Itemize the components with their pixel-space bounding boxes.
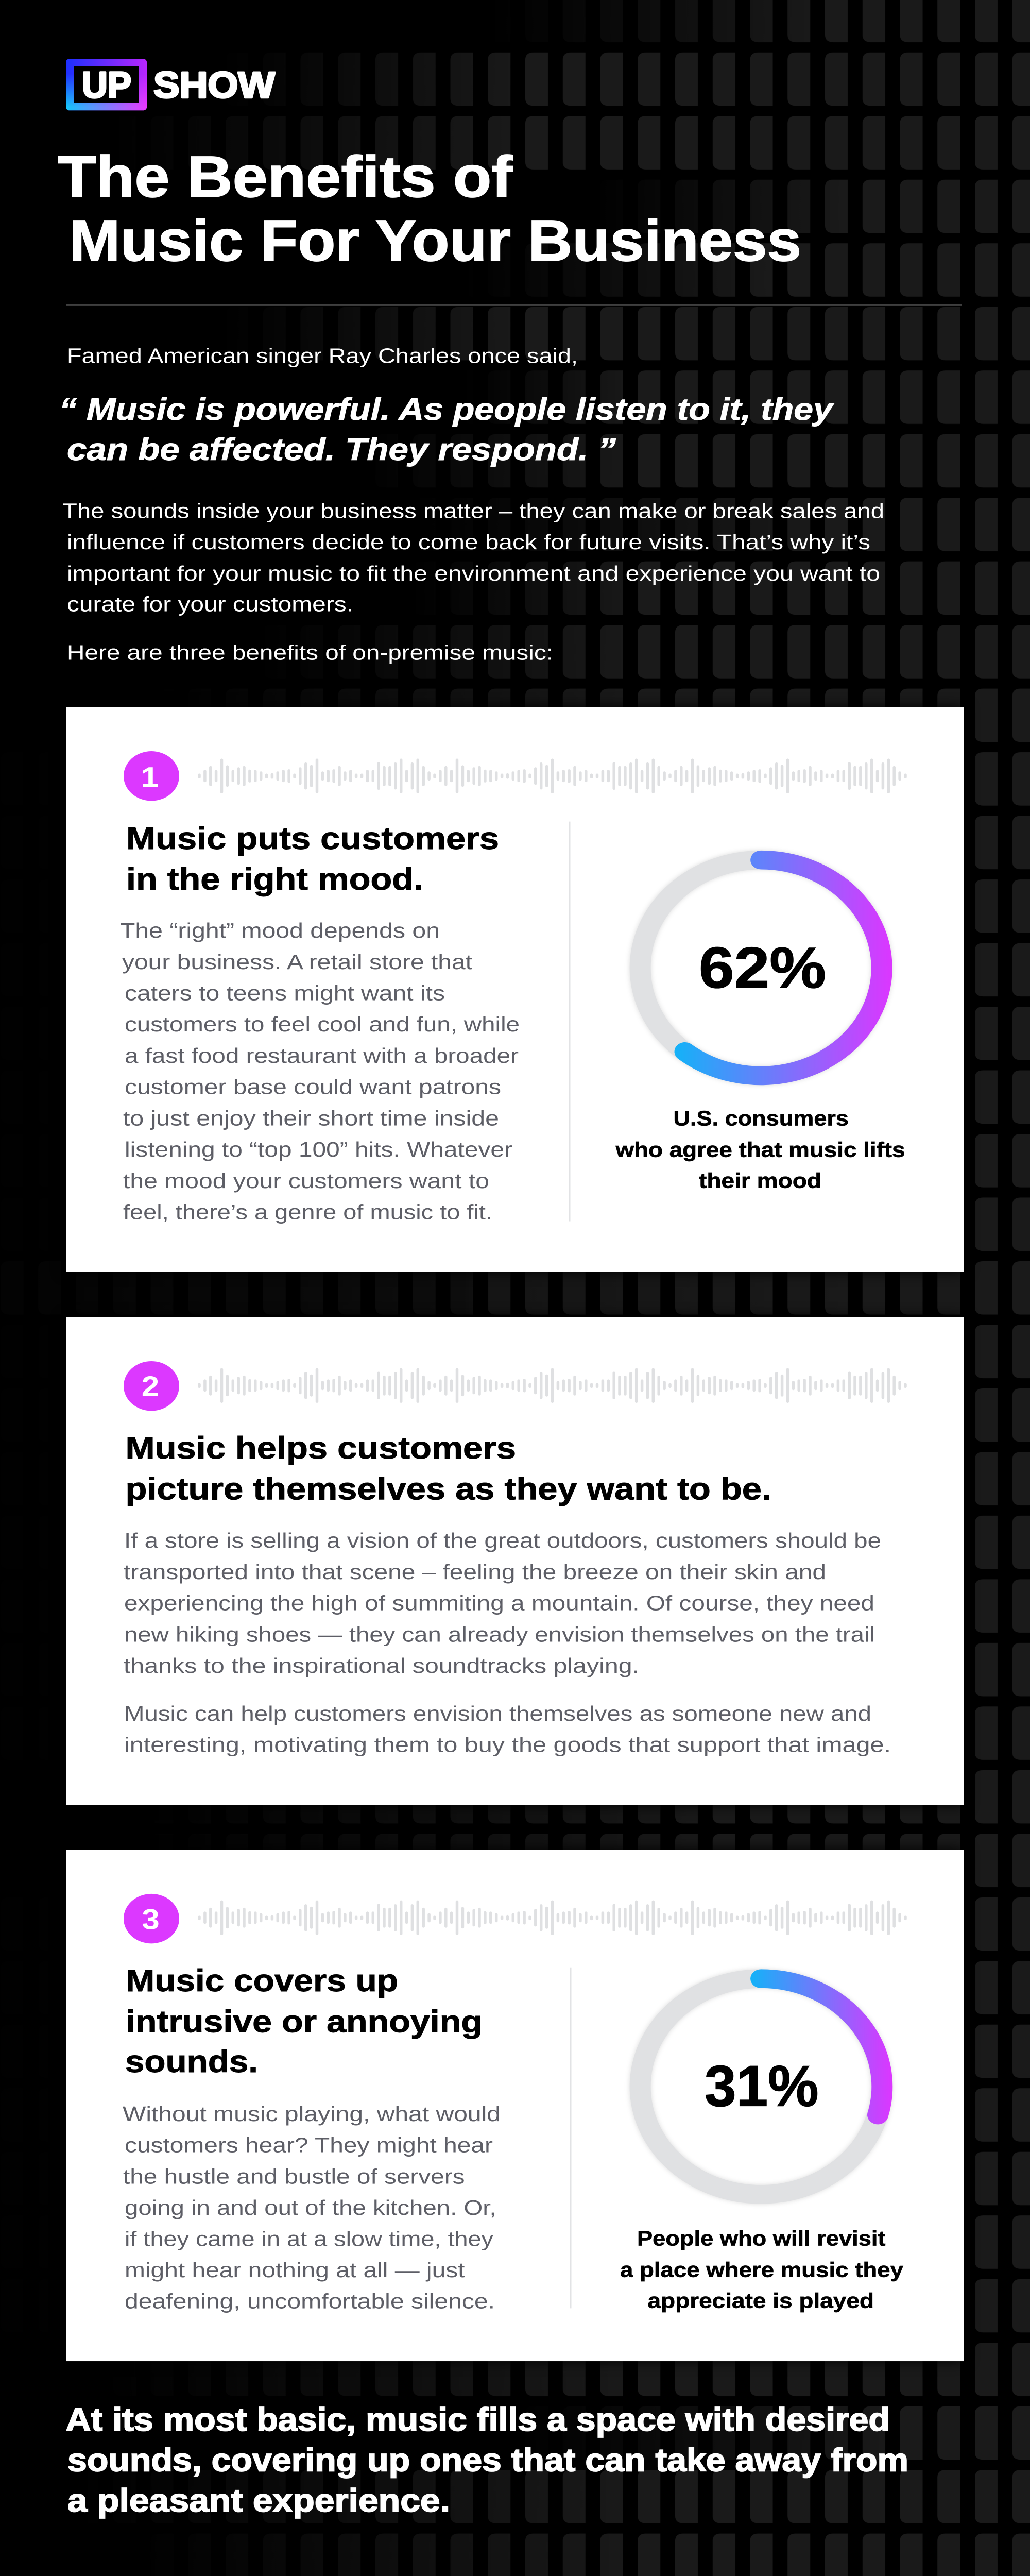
heading 2: picture themselves as they want to be. — [126, 1471, 771, 1506]
donut chart: 31% — [640, 1979, 882, 2194]
body text 2: transported into that scene – feeling the breeze on their skin and — [124, 1561, 826, 1584]
body text 3: going in and out of the kitchen. Or, — [125, 2196, 496, 2220]
body text 2: new hiking shoes — they can already envision themselves on the trail — [124, 1623, 875, 1647]
number badge 1 — [124, 751, 179, 801]
body text 1: customer base could want patrons — [125, 1076, 501, 1099]
heading 1 — [126, 821, 499, 896]
intro paragraph — [62, 500, 884, 616]
heading 2 — [126, 1431, 771, 1506]
lead-in line: Here are three benefits of on-premise music: — [67, 641, 553, 665]
stat caption 31%: a place where music they — [620, 2259, 904, 2282]
intro paragraph: curate for your customers. — [67, 593, 353, 616]
intro paragraph: important for your music to fit the environment and experience you want to — [67, 562, 880, 585]
logo: UPSHOW: UP — [82, 64, 131, 106]
body text 3: the hustle and bustle of servers — [123, 2165, 465, 2189]
heading 3: Music covers up — [126, 1963, 398, 1998]
body text 1: customers to feel cool and fun, while — [125, 1013, 520, 1037]
intro paragraph: influence if customers decide to come back for future visits. That’s why it’s — [67, 531, 870, 554]
body text 2: Music can help customers envision themselves as someone new and — [124, 1702, 871, 1725]
body text 1: feel, there’s a genre of music to fit. — [123, 1201, 492, 1224]
body text 1: to just enjoy their short time inside — [123, 1107, 499, 1130]
body text 3: customers hear? They might hear — [125, 2134, 493, 2157]
body text 3: if they came in at a slow time, they — [125, 2228, 493, 2251]
stat caption 31%: People who will revisit — [637, 2227, 885, 2250]
body text 1: listening to “top 100” hits. Whatever — [125, 1138, 512, 1162]
stat caption 31%: appreciate is played — [648, 2290, 874, 2313]
waveform 2 — [199, 1369, 905, 1402]
body text 1: The “right” mood depends on — [120, 919, 440, 943]
heading 3: sounds. — [125, 2044, 258, 2079]
pull quote — [59, 393, 834, 467]
pull quote: “ Music is powerful. As people listen to it, they — [59, 393, 834, 427]
closing statement — [66, 2401, 908, 2519]
heading 2: Music helps customers — [126, 1431, 516, 1465]
body text 3: might hear nothing at all — just — [125, 2259, 465, 2282]
title: The Benefits of — [58, 144, 513, 210]
body text 3: Without music playing, what would — [123, 2103, 501, 2126]
heading 1: in the right mood. — [126, 861, 423, 896]
waveform 3 — [199, 1902, 905, 1934]
body text 1 — [120, 919, 520, 1224]
body text 1: a fast food restaurant with a broader — [125, 1044, 519, 1067]
number badge 1: 1 — [141, 762, 159, 793]
panel: benefit 3 — [66, 1850, 964, 2361]
body text 2 — [124, 1529, 891, 1757]
intro paragraph: The sounds inside your business matter – they can make or break sales and — [62, 500, 884, 523]
title: Music For Your Business — [69, 208, 801, 274]
number badge 3: 3 — [142, 1904, 160, 1936]
body text 1: your business. A retail store that — [122, 951, 472, 974]
card background 2 — [66, 1317, 964, 1805]
heading 1: Music puts customers — [126, 821, 499, 856]
donut chart: 62% — [640, 860, 882, 1076]
body text 2: experiencing the high of summiting a mountain. Of course, they need — [124, 1592, 874, 1615]
closing statement: At its most basic, music fills a space with desired — [66, 2401, 890, 2438]
heading 3 — [125, 1963, 483, 2079]
body text 1: caters to teens might want its — [125, 982, 445, 1005]
logo: UPSHOW — [66, 59, 275, 110]
pull quote: can be affected. They respond. ” — [67, 433, 616, 467]
title — [58, 144, 801, 274]
waveform 1 — [199, 760, 905, 792]
heading 3: intrusive or annoying — [126, 2004, 483, 2039]
number badge 2 — [124, 1361, 179, 1411]
body text 2: interesting, motivating them to buy the goods that support that image. — [124, 1734, 891, 1757]
card background 1 — [66, 707, 964, 1272]
closing statement: sounds, covering up ones that can take away from — [67, 2442, 908, 2479]
donut chart: 62%: 62% — [699, 936, 826, 1000]
stat caption 62% — [615, 1107, 905, 1193]
body text 2: If a store is selling a vision of the great outdoors, customers should be — [124, 1529, 881, 1553]
intro line: Famed American singer Ray Charles once said, — [67, 345, 578, 368]
panel: benefit 2 — [66, 1317, 964, 1805]
logo: UPSHOW: SHOW — [153, 64, 275, 106]
body text 3: deafening, uncomfortable silence. — [125, 2290, 495, 2313]
card background 3 — [66, 1850, 964, 2361]
number badge 3 — [124, 1894, 179, 1943]
number badge 2: 2 — [142, 1371, 159, 1402]
closing statement: a pleasant experience. — [67, 2482, 450, 2519]
stat caption 62%: who agree that music lifts — [615, 1139, 905, 1162]
body text 1: the mood your customers want to — [123, 1170, 489, 1193]
stat caption 62%: their mood — [699, 1170, 821, 1193]
panel: benefit 1 — [66, 707, 964, 1272]
body text 3 — [123, 2103, 501, 2313]
stat caption 31% — [620, 2227, 904, 2313]
body text 2: thanks to the inspirational soundtracks playing. — [124, 1654, 639, 1678]
stat caption 62%: U.S. consumers — [674, 1107, 849, 1130]
donut chart: 31%: 31% — [705, 2054, 819, 2119]
